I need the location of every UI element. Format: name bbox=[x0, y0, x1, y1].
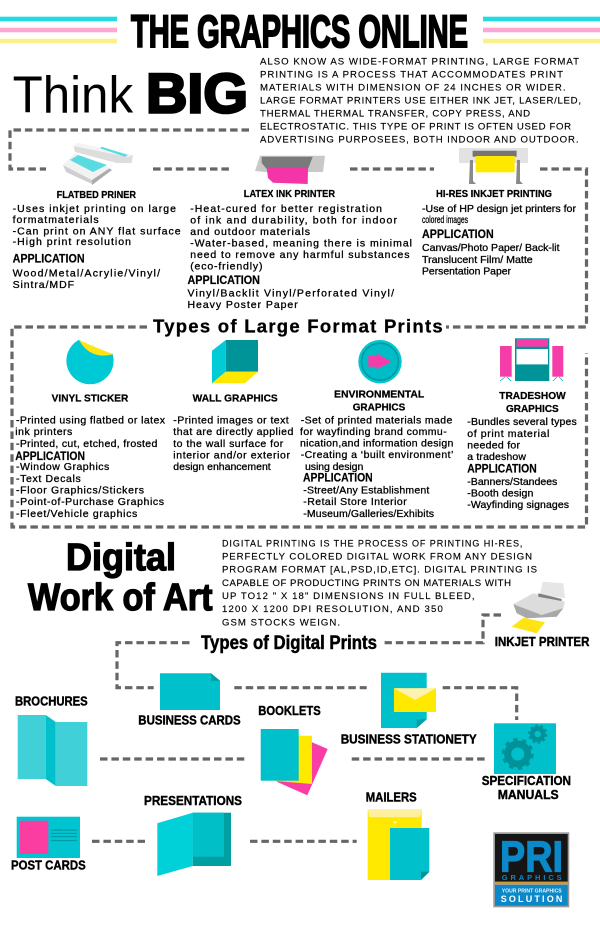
paragraph: digital printing: UP TO12 " X 18" DIMENSIONS IN FULL BLEED, bbox=[222, 591, 474, 602]
label: business cards: BUSINESS CARDS bbox=[138, 712, 241, 727]
section: tradeshow graphics: -Booth design bbox=[467, 488, 533, 500]
section: latex ink printer: -Heat-cured for better registration bbox=[190, 203, 382, 215]
section: hi-res inkjet printing: colored images bbox=[422, 214, 468, 226]
intro paragraph: large format printing: ALSO KNOW AS WIDE-FORMAT PRINTING, LARGE FORMAT bbox=[260, 56, 579, 68]
section: tradeshow graphics: APPLICATION bbox=[467, 461, 537, 475]
section: hi-res inkjet printing: Persentation Paper bbox=[422, 266, 511, 278]
icon: flatbed printer bbox=[63, 143, 133, 185]
section: flatbed printer: Sintra/MDF bbox=[13, 279, 74, 291]
logo: PRI Graphics: YOUR PRINT GRAPHICS bbox=[502, 888, 562, 894]
intro paragraph: large format printing: THERMAL THERMAL TRANSFER, COPY PRESS, AND bbox=[260, 108, 530, 120]
logo: PRI Graphics: SOLUTION bbox=[501, 894, 562, 904]
label: post cards: POST CARDS bbox=[11, 857, 86, 872]
heading: Think BIG bbox=[13, 62, 248, 125]
section: latex ink printer bbox=[188, 189, 412, 311]
section: environmental graphics: nication,and information design bbox=[300, 438, 453, 450]
section: vinyl sticker: -Point-of-Purchase Graphics bbox=[16, 496, 164, 508]
section: environmental graphics: -Set of printed materials made bbox=[301, 414, 452, 426]
section: latex ink printer: APPLICATION bbox=[188, 273, 260, 287]
logo: PRI Graphics bbox=[493, 832, 569, 907]
intro paragraph: large format printing: ADVERTISING PURPOSEES, BOTH INDOOR AND OUTDOOR. bbox=[260, 134, 578, 146]
section: tradeshow graphics: a tradeshow bbox=[467, 451, 526, 463]
label: specification manuals: MANUALS bbox=[498, 787, 559, 802]
icon: environmental graphics bbox=[358, 340, 402, 383]
section: vinyl sticker: -Text Decals bbox=[16, 473, 81, 485]
section: flatbed printer bbox=[13, 190, 181, 291]
icon: specification manuals bbox=[494, 723, 556, 774]
dashed connector: large format printers bbox=[10, 130, 586, 327]
heading: types of digital prints: Types of Digital Prints bbox=[201, 633, 377, 654]
paragraph: digital printing: DIGITAL PRINTING IS THE PROCESS OF PRINTING HI-RES, bbox=[222, 538, 522, 548]
section: vinyl sticker: -Printed using flatbed or latex bbox=[16, 414, 166, 426]
icon: business cards bbox=[160, 673, 220, 710]
section: latex ink printer: Heavy Poster Paper bbox=[188, 299, 298, 311]
section: environmental graphics: APPLICATION bbox=[303, 471, 373, 485]
section: tradeshow graphics: -Banners/Standees bbox=[467, 476, 557, 488]
icon: mailers bbox=[368, 809, 429, 880]
section: environmental graphics: -Street/Any Establishment bbox=[303, 484, 429, 496]
section: vinyl sticker: ink printers bbox=[15, 426, 72, 438]
section: environmental graphics: -Creating a ‘built environment’ bbox=[301, 449, 453, 461]
section: hi-res inkjet printing: Canvas/Photo Paper/ Back-lit bbox=[422, 242, 560, 254]
section: environmental graphics: GRAPHICS bbox=[353, 403, 406, 414]
section: wall graphics: -Printed images or text bbox=[173, 414, 289, 426]
section: latex ink printer: (eco-friendly) bbox=[190, 260, 262, 272]
section: vinyl sticker: -Floor Graphics/Stickers bbox=[16, 484, 144, 496]
section: latex ink printer: and outdoor materials bbox=[190, 226, 310, 238]
section: tradeshow graphics: GRAPHICS bbox=[506, 404, 559, 415]
label: mailers: MAILERS bbox=[366, 789, 417, 804]
heading: types of large format prints: Types of Large Format Prints bbox=[153, 316, 443, 336]
section: wall graphics: to the wall surface for bbox=[173, 438, 284, 450]
section: wall graphics: WALL GRAPHICS bbox=[193, 394, 278, 405]
section: wall graphics bbox=[173, 394, 293, 473]
section: tradeshow graphics: -Wayfinding signages bbox=[467, 499, 569, 511]
section: flatbed printer: FLATBED PRINER bbox=[57, 190, 137, 201]
label: specification manuals: SPECIFICATION bbox=[482, 773, 571, 788]
paragraph: digital printing: 1200 X 1200 DPI RESOLUTION, AND 350 bbox=[222, 604, 443, 615]
heading: Digital Work of Art: Work of Art bbox=[28, 577, 213, 619]
icon: tradeshow graphics bbox=[500, 338, 563, 381]
section: latex ink printer: of ink and durability, both for indoor bbox=[190, 214, 398, 226]
intro paragraph: large format printing: LARGE FORMAT PRINTERS USE EITHER INK JET, LASER/LED, bbox=[260, 96, 581, 106]
label: specification manuals bbox=[482, 773, 571, 802]
section: wall graphics: interior and/or exterior bbox=[173, 450, 290, 462]
heading: Think BIG: BIG bbox=[146, 62, 248, 125]
intro paragraph: large format printing: MATERIALS WITH DIMENSION OF 24 INCHES OR WIDER. bbox=[260, 82, 566, 94]
icon: business stationery bbox=[381, 673, 436, 728]
heading: Think BIG: Think bbox=[13, 67, 134, 125]
section: wall graphics: design enhancement bbox=[173, 461, 271, 473]
section: tradeshow graphics: of print material bbox=[467, 428, 549, 440]
section: flatbed printer: Wood/Metal/Acrylie/Vinyl/ bbox=[13, 268, 160, 280]
paragraph: digital printing: PERFECTLY COLORED DIGITAL WORK FROM ANY DESIGN bbox=[222, 552, 532, 562]
section: hi-res inkjet printing: APPLICATION bbox=[422, 227, 494, 241]
section: environmental graphics: ENVIRONMENTAL bbox=[334, 390, 424, 401]
label: booklets: BOOKLETS bbox=[258, 703, 321, 718]
section: environmental graphics: -Retail Store Interior bbox=[303, 496, 407, 508]
section: latex ink printer: need to remove any harmful substances bbox=[190, 249, 410, 261]
icon: inkjet printer bbox=[512, 582, 565, 633]
section: tradeshow graphics: needed for bbox=[467, 440, 520, 452]
icon: hi-res inkjet printer bbox=[459, 148, 528, 184]
paragraph: digital printing: PROGRAM FORMAT [AL,PSD,ID,ETC]. DIGITAL PRINTING IS bbox=[222, 564, 537, 576]
section: environmental graphics: using design bbox=[305, 461, 363, 473]
section: tradeshow graphics: -Bundles several types bbox=[467, 416, 577, 428]
section: vinyl sticker: -Window Graphics bbox=[16, 461, 109, 473]
logo: PRI Graphics: GRAPHICS bbox=[502, 873, 562, 882]
section: vinyl sticker bbox=[15, 394, 166, 520]
section: vinyl sticker: VINYL STICKER bbox=[52, 394, 129, 405]
section: flatbed printer: formatmaterials bbox=[13, 214, 99, 226]
icon: booklets bbox=[261, 729, 328, 795]
section: vinyl sticker: -Printed, cut, etched, frosted bbox=[16, 438, 157, 450]
section: latex ink printer: -Water-based, meaning there is minimal bbox=[190, 238, 412, 250]
section: latex ink printer: Vinyl/Backlit Vinyl/Perforated Vinyl/ bbox=[188, 288, 394, 300]
section: vinyl sticker: APPLICATION bbox=[15, 449, 85, 463]
label: inkjet printer: INKJET PRINTER bbox=[495, 634, 590, 649]
header stripes left bbox=[0, 17, 117, 43]
icon: wall graphics bbox=[212, 340, 258, 383]
intro paragraph: large format printing: ELECTROSTATIC. THIS TYPE OF PRINT IS OFTEN USED FOR bbox=[260, 122, 571, 132]
section: wall graphics: that are directly applied bbox=[173, 426, 293, 438]
section: flatbed printer: -Uses inkjet printing on large bbox=[13, 203, 176, 215]
label: presentations: PRESENTATIONS bbox=[144, 793, 242, 808]
heading: Digital Work of Art: Digital bbox=[66, 537, 176, 579]
paragraph: digital printing: CAPABLE OF PRODUCTING PRINTS ON MATERIALS WITH bbox=[222, 578, 511, 589]
icon: brochure bbox=[18, 715, 87, 786]
intro paragraph: large format printing: PRINTING IS A PROCESS THAT ACCOMMODATES PRINT bbox=[260, 70, 563, 80]
dashed connector: digital prints bbox=[92, 615, 517, 841]
icon: post card bbox=[17, 817, 80, 858]
icon: presentation folder bbox=[157, 813, 231, 876]
icon: vinyl sticker bbox=[66, 336, 118, 384]
section: environmental graphics: for wayfinding brand commu- bbox=[300, 426, 447, 438]
section: tradeshow graphics: TRADESHOW bbox=[499, 391, 566, 402]
section: environmental graphics bbox=[300, 390, 453, 520]
paragraph: digital printing: GSM STOCKS WEIGN. bbox=[222, 618, 340, 628]
section: environmental graphics: -Museum/Galleries/Exhibits bbox=[303, 508, 434, 520]
section: flatbed printer: -High print resolution bbox=[13, 236, 131, 248]
label: brochures: BROCHURES bbox=[15, 694, 88, 709]
section: flatbed printer: -Can print on ANY flat surface bbox=[13, 226, 181, 238]
heading: Digital Work of Art bbox=[28, 537, 213, 619]
section: hi-res inkjet printing: -Use of HP design jet printers for bbox=[422, 203, 577, 215]
intro paragraph: large format printing bbox=[260, 56, 581, 146]
dashed frame: large format prints bbox=[12, 327, 586, 527]
section: vinyl sticker: -Fleet/Vehicle graphics bbox=[16, 508, 137, 520]
logo: PRI Graphics: PRI bbox=[500, 833, 563, 882]
section: hi-res inkjet printing: Translucent Film/ Matte bbox=[422, 254, 533, 266]
paragraph: digital printing bbox=[222, 538, 537, 628]
section: tradeshow graphics bbox=[467, 391, 577, 511]
header stripes right bbox=[483, 17, 600, 43]
section: hi-res inkjet printing: HI-RES INKJET PRINTING bbox=[436, 189, 552, 200]
section: flatbed printer: APPLICATION bbox=[13, 252, 85, 266]
section: hi-res inkjet printing bbox=[422, 189, 577, 278]
section: latex ink printer: LATEX INK PRINTER bbox=[244, 189, 336, 200]
label: business stationety: BUSINESS STATIONETY bbox=[341, 731, 477, 746]
icon: latex ink printer bbox=[255, 156, 325, 184]
